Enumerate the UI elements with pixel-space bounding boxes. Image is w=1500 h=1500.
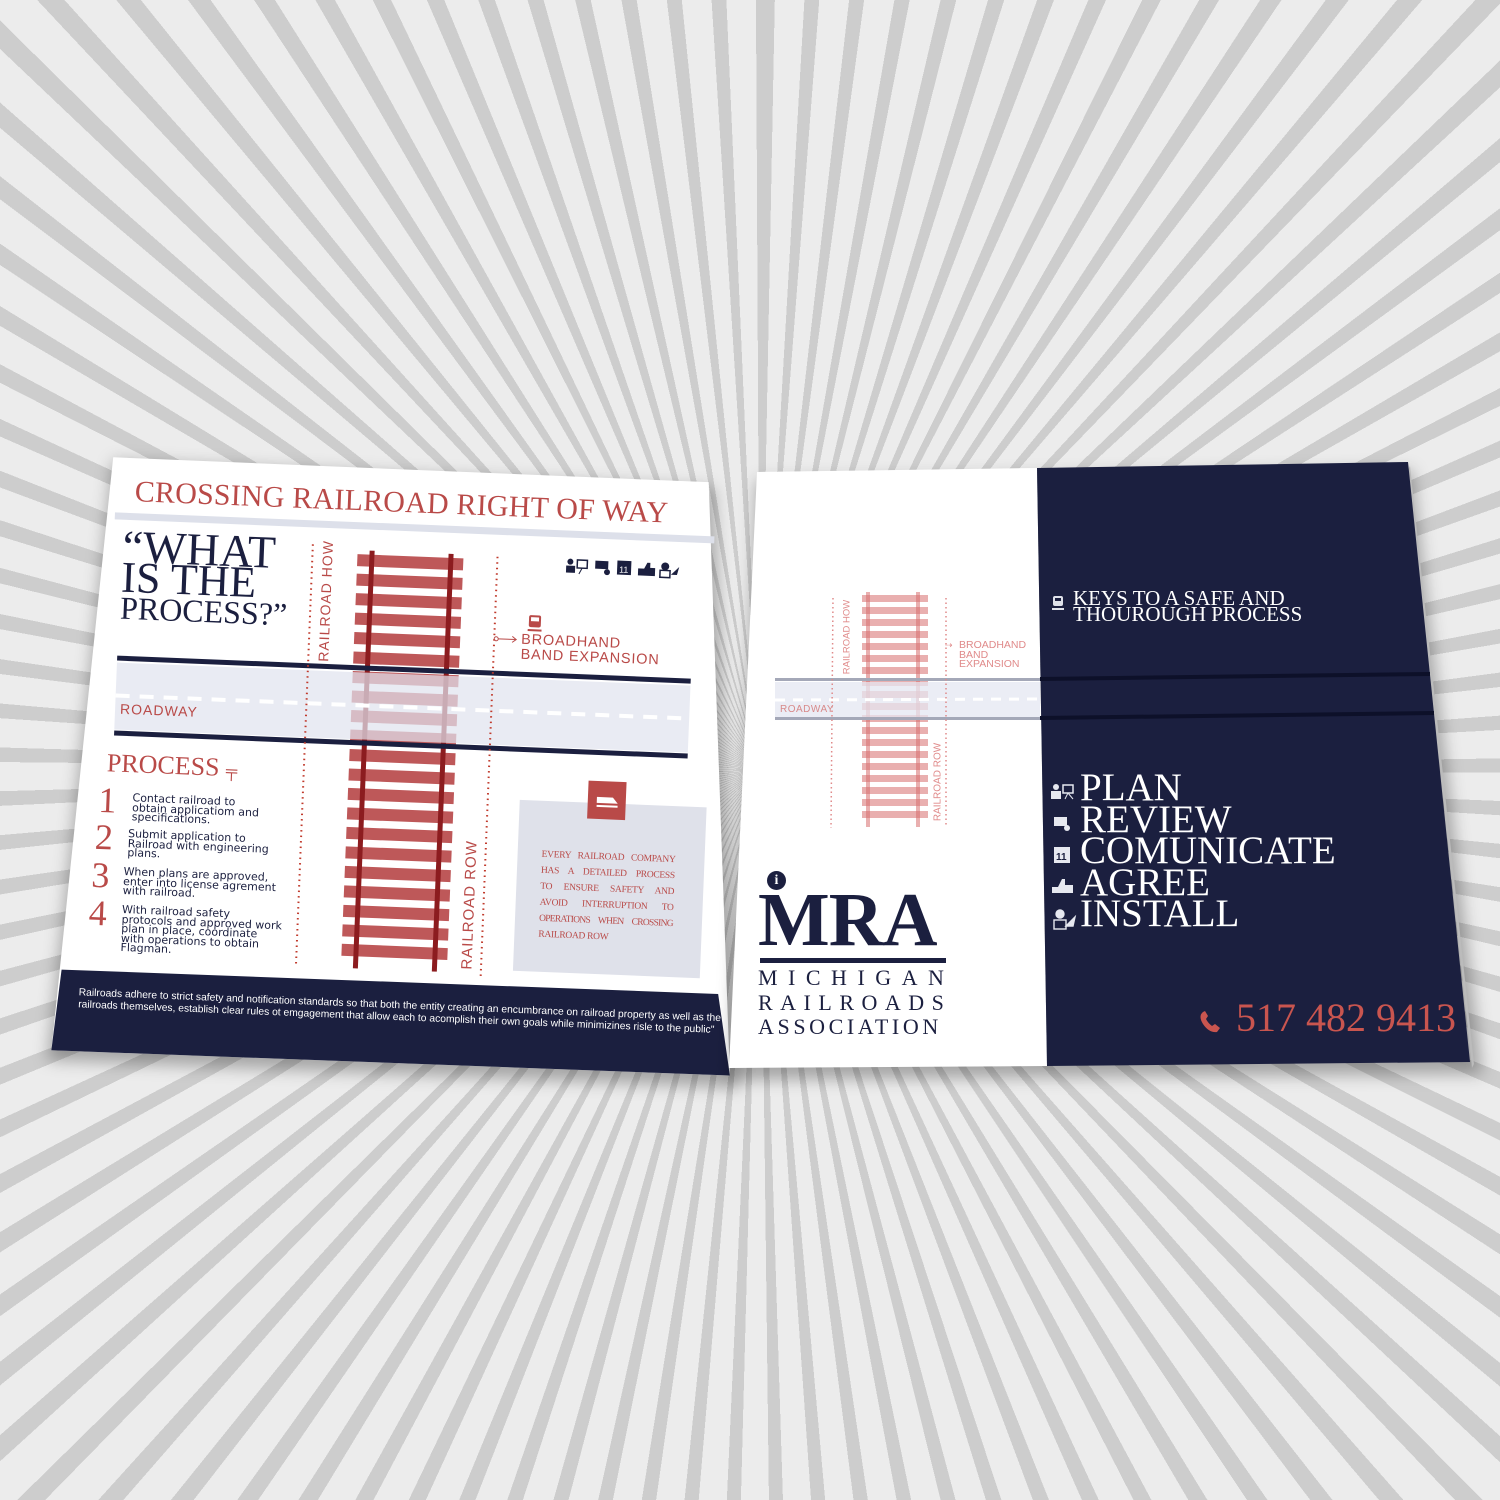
keys heading: THOUROUGH PROCESS — [1073, 602, 1302, 626]
step 1 — [98, 780, 259, 826]
info box: HAS A DETAILED PROCESS — [541, 866, 675, 881]
process list: 1 — [98, 780, 117, 821]
heading: what is the process: “WHAT — [122, 521, 277, 578]
broadband callout — [494, 615, 660, 668]
mini roadway label: ROADWAY — [780, 704, 834, 715]
logo: MRA: MICHIGAN — [758, 965, 954, 990]
logo: MRA: MRA — [758, 878, 937, 962]
steps list: INSTALL — [1080, 892, 1239, 935]
logo: MRA: RAILROADS — [758, 990, 951, 1014]
broadband callout: BROADHAND — [521, 632, 621, 652]
icon: phone — [1200, 1011, 1220, 1032]
icon: review — [1054, 817, 1070, 831]
icon: plan — [1051, 784, 1074, 800]
mini label row: RAILROAD ROW — [932, 743, 944, 821]
icon: train badge — [587, 781, 627, 820]
steps list: PLAN — [1080, 766, 1182, 809]
info box: EVERY RAILROAD COMPANY — [541, 850, 676, 865]
process list: With railroad safety — [122, 903, 230, 920]
arrow — [494, 636, 517, 643]
process list: protocols and approved work — [121, 912, 282, 932]
phone number: 517 482 9413 — [1236, 995, 1456, 1040]
process list — [88, 780, 282, 956]
icon: thumbs up — [1052, 879, 1073, 893]
icon: calendar: 11 — [1056, 852, 1067, 863]
process list: Railroad with engineering — [127, 837, 269, 855]
mini track — [862, 592, 928, 827]
panel: left brochure card — [40, 452, 746, 1096]
logo: MRA: ASSOCIATION — [758, 1014, 942, 1039]
road label: ROADWAY — [120, 701, 198, 720]
process list: specifications. — [132, 810, 211, 826]
broadband callout: BAND EXPANSION — [520, 647, 660, 668]
process list: plan in place, coordinate — [121, 922, 257, 940]
process list: with operations to obtain — [121, 931, 259, 950]
info box — [513, 800, 707, 978]
mini broadband callout: ⇢ — [945, 640, 953, 650]
step 4 — [88, 893, 282, 956]
process heading: PROCESS ╤ — [106, 748, 238, 782]
heading: what is the process: PROCESS?” — [119, 590, 288, 632]
icon: train — [1052, 596, 1064, 610]
icon row — [566, 558, 680, 578]
process list: Submit application to — [128, 827, 246, 845]
info box: TO ENSURE SAFETY AND — [540, 882, 674, 897]
keys heading: KEYS TO A SAFE AND — [1073, 586, 1285, 610]
card shapes — [40, 452, 746, 1096]
heading: what is the process: IS THE — [120, 553, 257, 607]
process list: plans. — [127, 846, 161, 860]
steps list: AGREE — [1080, 860, 1210, 904]
icon row: 11 — [619, 565, 629, 575]
info box: OPERATIONS WHEN CROSSING — [539, 914, 673, 929]
icon: info circle — [767, 871, 786, 890]
footer text: Railroads adhere to strict safety and notification standards so that both the entity creating an encumbrance on railroad property as well as the — [78, 987, 721, 1024]
icon: installer — [1053, 909, 1076, 930]
process list: enter into license agrement — [123, 874, 276, 894]
heading: what is the process — [119, 521, 288, 632]
step 2 — [94, 817, 269, 860]
process list: Contact railroad to — [132, 791, 236, 808]
icon: train — [528, 615, 542, 632]
logo: MRA — [758, 871, 954, 1039]
steps list — [1051, 766, 1336, 935]
title: CROSSING RAILROAD RIGHT OF WAY — [134, 475, 669, 530]
panel: right brochure card: BROADHAND — [959, 639, 1026, 651]
process list: with railroad. — [123, 884, 195, 900]
process list: obtain applicatiom and — [132, 801, 259, 819]
icon: calendar — [1054, 847, 1070, 863]
icon: info circle: i — [775, 873, 778, 888]
keys heading — [1052, 586, 1302, 626]
process list: 3 — [91, 855, 110, 895]
process list: 2 — [94, 817, 114, 858]
mini broadband callout — [945, 639, 1026, 670]
mini labels: RAILROAD HOW — [842, 600, 852, 674]
steps list: REVIEW — [1080, 798, 1232, 840]
steps list: COMUNICATE — [1080, 829, 1336, 872]
panel: right brochure card: EXPANSION — [959, 658, 1020, 670]
process list: When plans are approved, — [123, 865, 269, 884]
process list: Flagman. — [120, 941, 172, 956]
step 3 — [91, 855, 276, 900]
label: railroad how: RAILROAD HOW — [315, 540, 336, 662]
footer text: railroads themselves, establish clear rules ot emgagement that allow each to acomplish their own goals while minimizines risle to the public" — [78, 999, 715, 1036]
panel: right brochure card: BAND — [959, 648, 988, 660]
process list: 4 — [88, 893, 108, 933]
info box: AVOID INTERRUPTION TO — [539, 898, 674, 913]
label: railroad row: RAILROAD ROW — [458, 840, 481, 970]
track diagram — [114, 544, 691, 976]
road — [114, 663, 691, 753]
info box: RAILROAD ROW — [538, 930, 609, 942]
